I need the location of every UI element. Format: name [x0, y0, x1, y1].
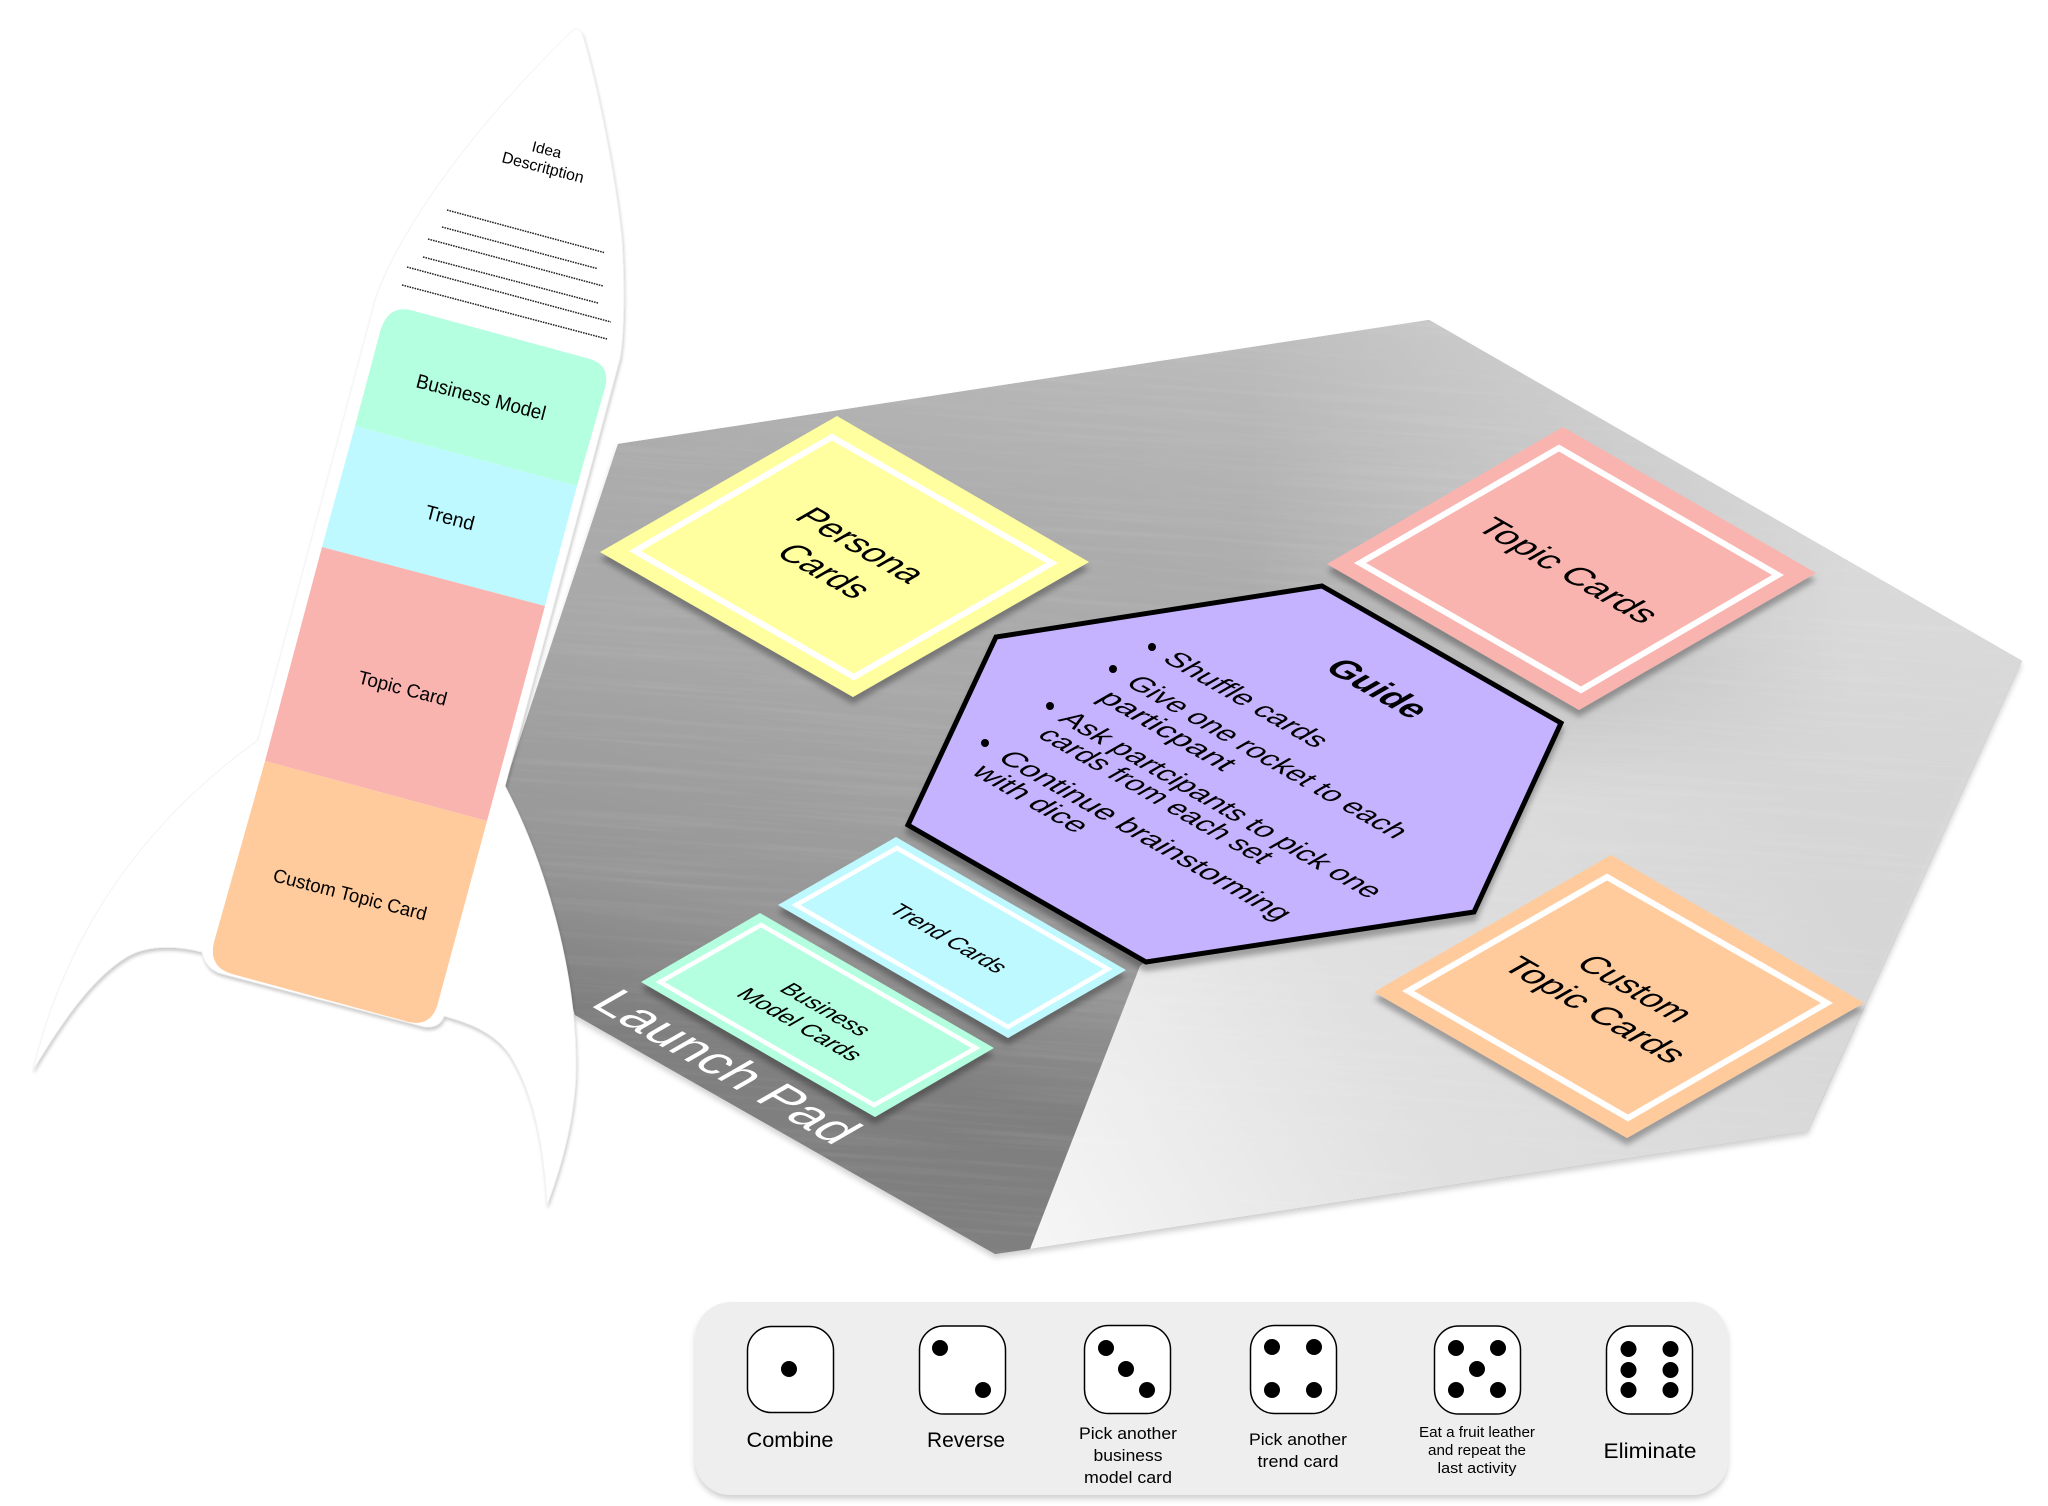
- die 6: eliminate: [1604, 1326, 1696, 1463]
- topic cards: [1327, 427, 1816, 710]
- business model cards: Model Cards: [730, 985, 869, 1065]
- die 5: eat a fruit leather: [1419, 1326, 1535, 1477]
- die 5: eat a fruit leather: and repeat the: [1428, 1443, 1526, 1459]
- dice legend panel: [695, 1302, 1728, 1495]
- guide hexagon: [908, 586, 1561, 962]
- rocket slot: business model: Business Model: [414, 371, 548, 425]
- trend cards: [778, 837, 1126, 1038]
- custom topic cards: [1374, 855, 1864, 1138]
- rocket slot: topic card: [265, 547, 545, 821]
- persona cards: Cards: [767, 538, 882, 604]
- rocket writing lines: [402, 210, 611, 339]
- die 1: combine: Combine: [746, 1429, 834, 1452]
- custom topic cards: Custom: [1567, 950, 1703, 1028]
- die 4: pick another trend card: trend card: [1258, 1452, 1338, 1471]
- die 2: reverse: [920, 1326, 1006, 1452]
- guide bullet list: Continue brainstorming: [990, 747, 1300, 925]
- persona cards: [600, 416, 1089, 697]
- die 3: pick another business model card: Pick another: [1079, 1424, 1177, 1443]
- launch pad label: Launch Pad: [579, 982, 874, 1152]
- custom topic cards: Topic Cards: [1493, 952, 1697, 1069]
- die 6: eliminate: Eliminate: [1604, 1440, 1696, 1463]
- guide bullet list: cards from each set: [1030, 724, 1281, 868]
- guide bullet list: Give one rocket to each: [1118, 672, 1416, 843]
- guide bullet list: Ask partcipants to pick one: [1051, 708, 1391, 903]
- rocket slot: custom topic card: [213, 761, 487, 1023]
- persona cards: Persona: [786, 502, 938, 589]
- die 3: pick another business model card: model card: [1084, 1468, 1172, 1487]
- rocket slot: custom topic card: Custom Topic Card: [271, 866, 429, 925]
- die 2: reverse: Reverse: [927, 1429, 1005, 1452]
- die 5: eat a fruit leather: last activity: [1438, 1461, 1517, 1477]
- guide bullet list: particpant: [1090, 687, 1244, 775]
- rocket slot: topic card: Topic Card: [356, 668, 449, 711]
- rocket: [33, 29, 624, 1205]
- rocket slot: trend: [322, 426, 577, 606]
- die 1: combine: [746, 1326, 834, 1452]
- die 4: pick another trend card: Pick another: [1249, 1430, 1347, 1449]
- rocket slot: trend: Trend: [423, 502, 477, 535]
- topic cards: Topic Cards: [1467, 513, 1669, 629]
- die 3: pick another business model card: business: [1094, 1446, 1162, 1465]
- rocket slot: business model: [355, 309, 606, 486]
- guide bullet list: [963, 643, 1416, 925]
- die 5: eat a fruit leather: Eat a fruit leather: [1419, 1425, 1535, 1441]
- die 3: pick another business model card: [1079, 1326, 1177, 1487]
- business model cards: [641, 913, 994, 1117]
- business model cards: Business: [773, 980, 878, 1040]
- guide bullet list: with dice: [963, 760, 1097, 837]
- die 4: pick another trend card: [1249, 1326, 1347, 1471]
- guide heading: Guide: [1316, 653, 1440, 724]
- trend cards: Trend Cards: [882, 901, 1014, 977]
- guide bullet list: Shuffle cards: [1155, 648, 1337, 752]
- rocket heading: idea description: Idea: [530, 138, 564, 162]
- launch pad board: [506, 320, 2023, 1260]
- rocket heading: idea description: Descritption: [500, 149, 586, 187]
